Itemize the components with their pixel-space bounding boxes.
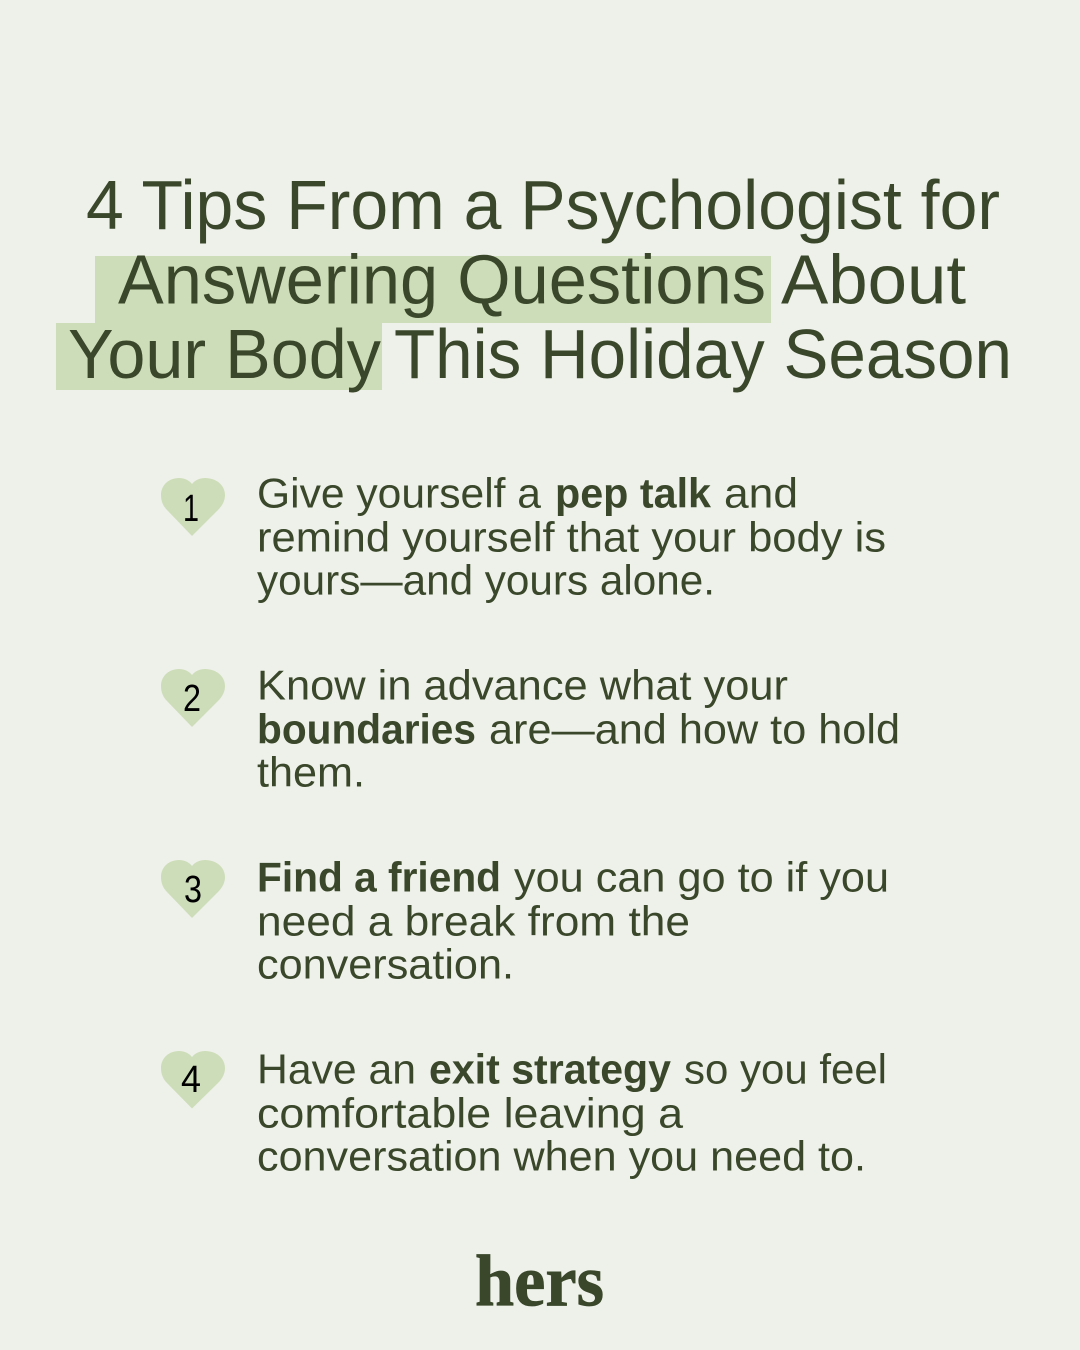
tip 1 text: remind yourself that your body is: [257, 514, 886, 560]
tip 1 text: pep talk: [555, 470, 712, 516]
icon: heart number 2: 2: [183, 678, 201, 720]
icon: heart number 3: 3: [184, 869, 202, 911]
tip 3 text: [257, 854, 889, 988]
tip 4 text: so you feel: [684, 1046, 887, 1092]
title: [56, 166, 1012, 393]
icon: heart number 2: [161, 669, 225, 727]
tip 3 text: conversation.: [257, 940, 514, 988]
tip 4 text: [257, 1046, 887, 1180]
title: About: [781, 240, 966, 318]
title: Answering Questions: [118, 240, 766, 318]
tip 2 text: [257, 662, 900, 796]
tip 3 text: you can go to if you: [514, 854, 889, 900]
tip 2 text: are—and how to hold: [489, 706, 900, 752]
icon: heart number 1: [161, 478, 225, 536]
tip 4 text: comfortable leaving a: [257, 1090, 684, 1136]
icon: heart number 4: [161, 1051, 225, 1108]
tip 3 text: Find a friend: [257, 854, 501, 900]
tip 2: [161, 662, 900, 796]
icon: heart number 3: [161, 860, 225, 918]
icon: heart number 4: 4: [181, 1059, 201, 1101]
title highlight bands: [56, 256, 771, 390]
title: 4 Tips From a Psychologist for: [86, 166, 1000, 244]
tip 4: [161, 1046, 887, 1180]
tip 3 text: need a break from the: [257, 898, 690, 944]
tip 4 text: Have an: [257, 1046, 416, 1092]
tip 1 text: yours—and yours alone.: [257, 556, 715, 604]
tip 4 text: exit strategy: [429, 1046, 672, 1092]
title: This Holiday Season: [394, 315, 1012, 393]
icon: heart number 1: 1: [183, 488, 199, 530]
tip 1 text: [257, 470, 886, 604]
tip 4 text: conversation when you need to.: [257, 1132, 866, 1180]
title: Your Body: [68, 315, 381, 393]
tip 3: [161, 854, 889, 988]
tip 2 text: boundaries: [257, 706, 476, 752]
tip 1 text: and: [724, 470, 798, 516]
tip 2 text: Know in advance what your: [257, 662, 788, 708]
tip 2 text: them.: [257, 748, 365, 796]
logo: hers: hers: [475, 1240, 604, 1322]
tip 1: [161, 470, 886, 604]
tip 1 text: Give yourself a: [257, 470, 542, 516]
